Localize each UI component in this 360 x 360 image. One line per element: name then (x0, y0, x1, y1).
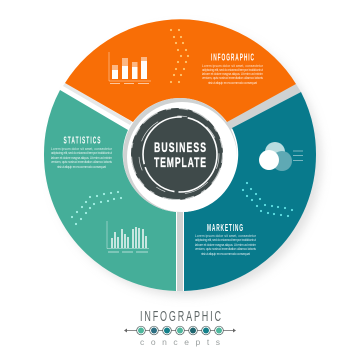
text block: marketing: nisi ut aliquip ex ea commodo consequat (201, 252, 250, 256)
central hub: TEMPLATE (154, 155, 206, 171)
text block: marketing: Lorem ipsum dolor sit amet, consectetur (195, 234, 257, 238)
footer subtitle: concepts (140, 337, 220, 347)
panel: marketing (184, 92, 316, 291)
heading: statistics: STATISTICS (64, 135, 100, 146)
bar chart: infographic (109, 52, 151, 84)
text block: infographic: adipiscing elit, sed do eiusmod tempor incididunt ut (202, 68, 263, 72)
central hub (123, 98, 237, 212)
dots: marketing (242, 182, 293, 217)
text block: statistics: adipiscing elit, sed do eiusmod tempor incididunt ut (51, 151, 112, 155)
hub title: BUSINESS (154, 140, 206, 156)
panel: statistics (44, 90, 176, 291)
footer timeline (124, 326, 236, 335)
text block: statistics: veniam, quis nostrud exercitation ullamco laboris (51, 160, 112, 164)
text block: infographic (202, 64, 264, 85)
text block: marketing: veniam, quis nostrud exercitation ullamco laboris (195, 247, 256, 251)
text block: marketing: adipiscing elit, sed do eiusmod tempor incididunt ut (195, 238, 256, 242)
text block: marketing (195, 234, 257, 256)
text block: statistics (51, 147, 113, 169)
text block: infographic: labore et dolore magna aliqua. Ut enim ad minim (202, 72, 263, 76)
text block: infographic: nisi ut aliquip ex ea commodo consequat (208, 81, 257, 85)
text block: statistics: labore et dolore magna aliqua. Ut enim ad minim (51, 156, 112, 160)
text block: infographic: veniam, quis nostrud exercitation ullamco laboris (202, 76, 263, 80)
dots: infographic (170, 29, 189, 83)
footer title: INFOGRAPHIC (140, 308, 221, 325)
dots: statistics (71, 191, 122, 225)
base disc (44, 19, 316, 291)
venn diagram (259, 142, 303, 171)
text block: infographic: Lorem ipsum dolor sit amet, consectetur (202, 64, 264, 68)
bar chart: statistics (107, 221, 149, 252)
heading: infographic: INFOGRAPHIC (211, 52, 254, 63)
text block: statistics: nisi ut aliquip ex ea commodo consequat (57, 165, 106, 169)
heading: marketing: MARKETING (207, 222, 243, 234)
drop shadow (51, 26, 321, 296)
panel: infographic (65, 19, 296, 122)
text block: marketing: labore et dolore magna aliqua. Ut enim ad minim (195, 243, 256, 247)
divider gaps (63, 83, 301, 291)
text block: statistics: Lorem ipsum dolor sit amet, consectetur (51, 147, 113, 151)
